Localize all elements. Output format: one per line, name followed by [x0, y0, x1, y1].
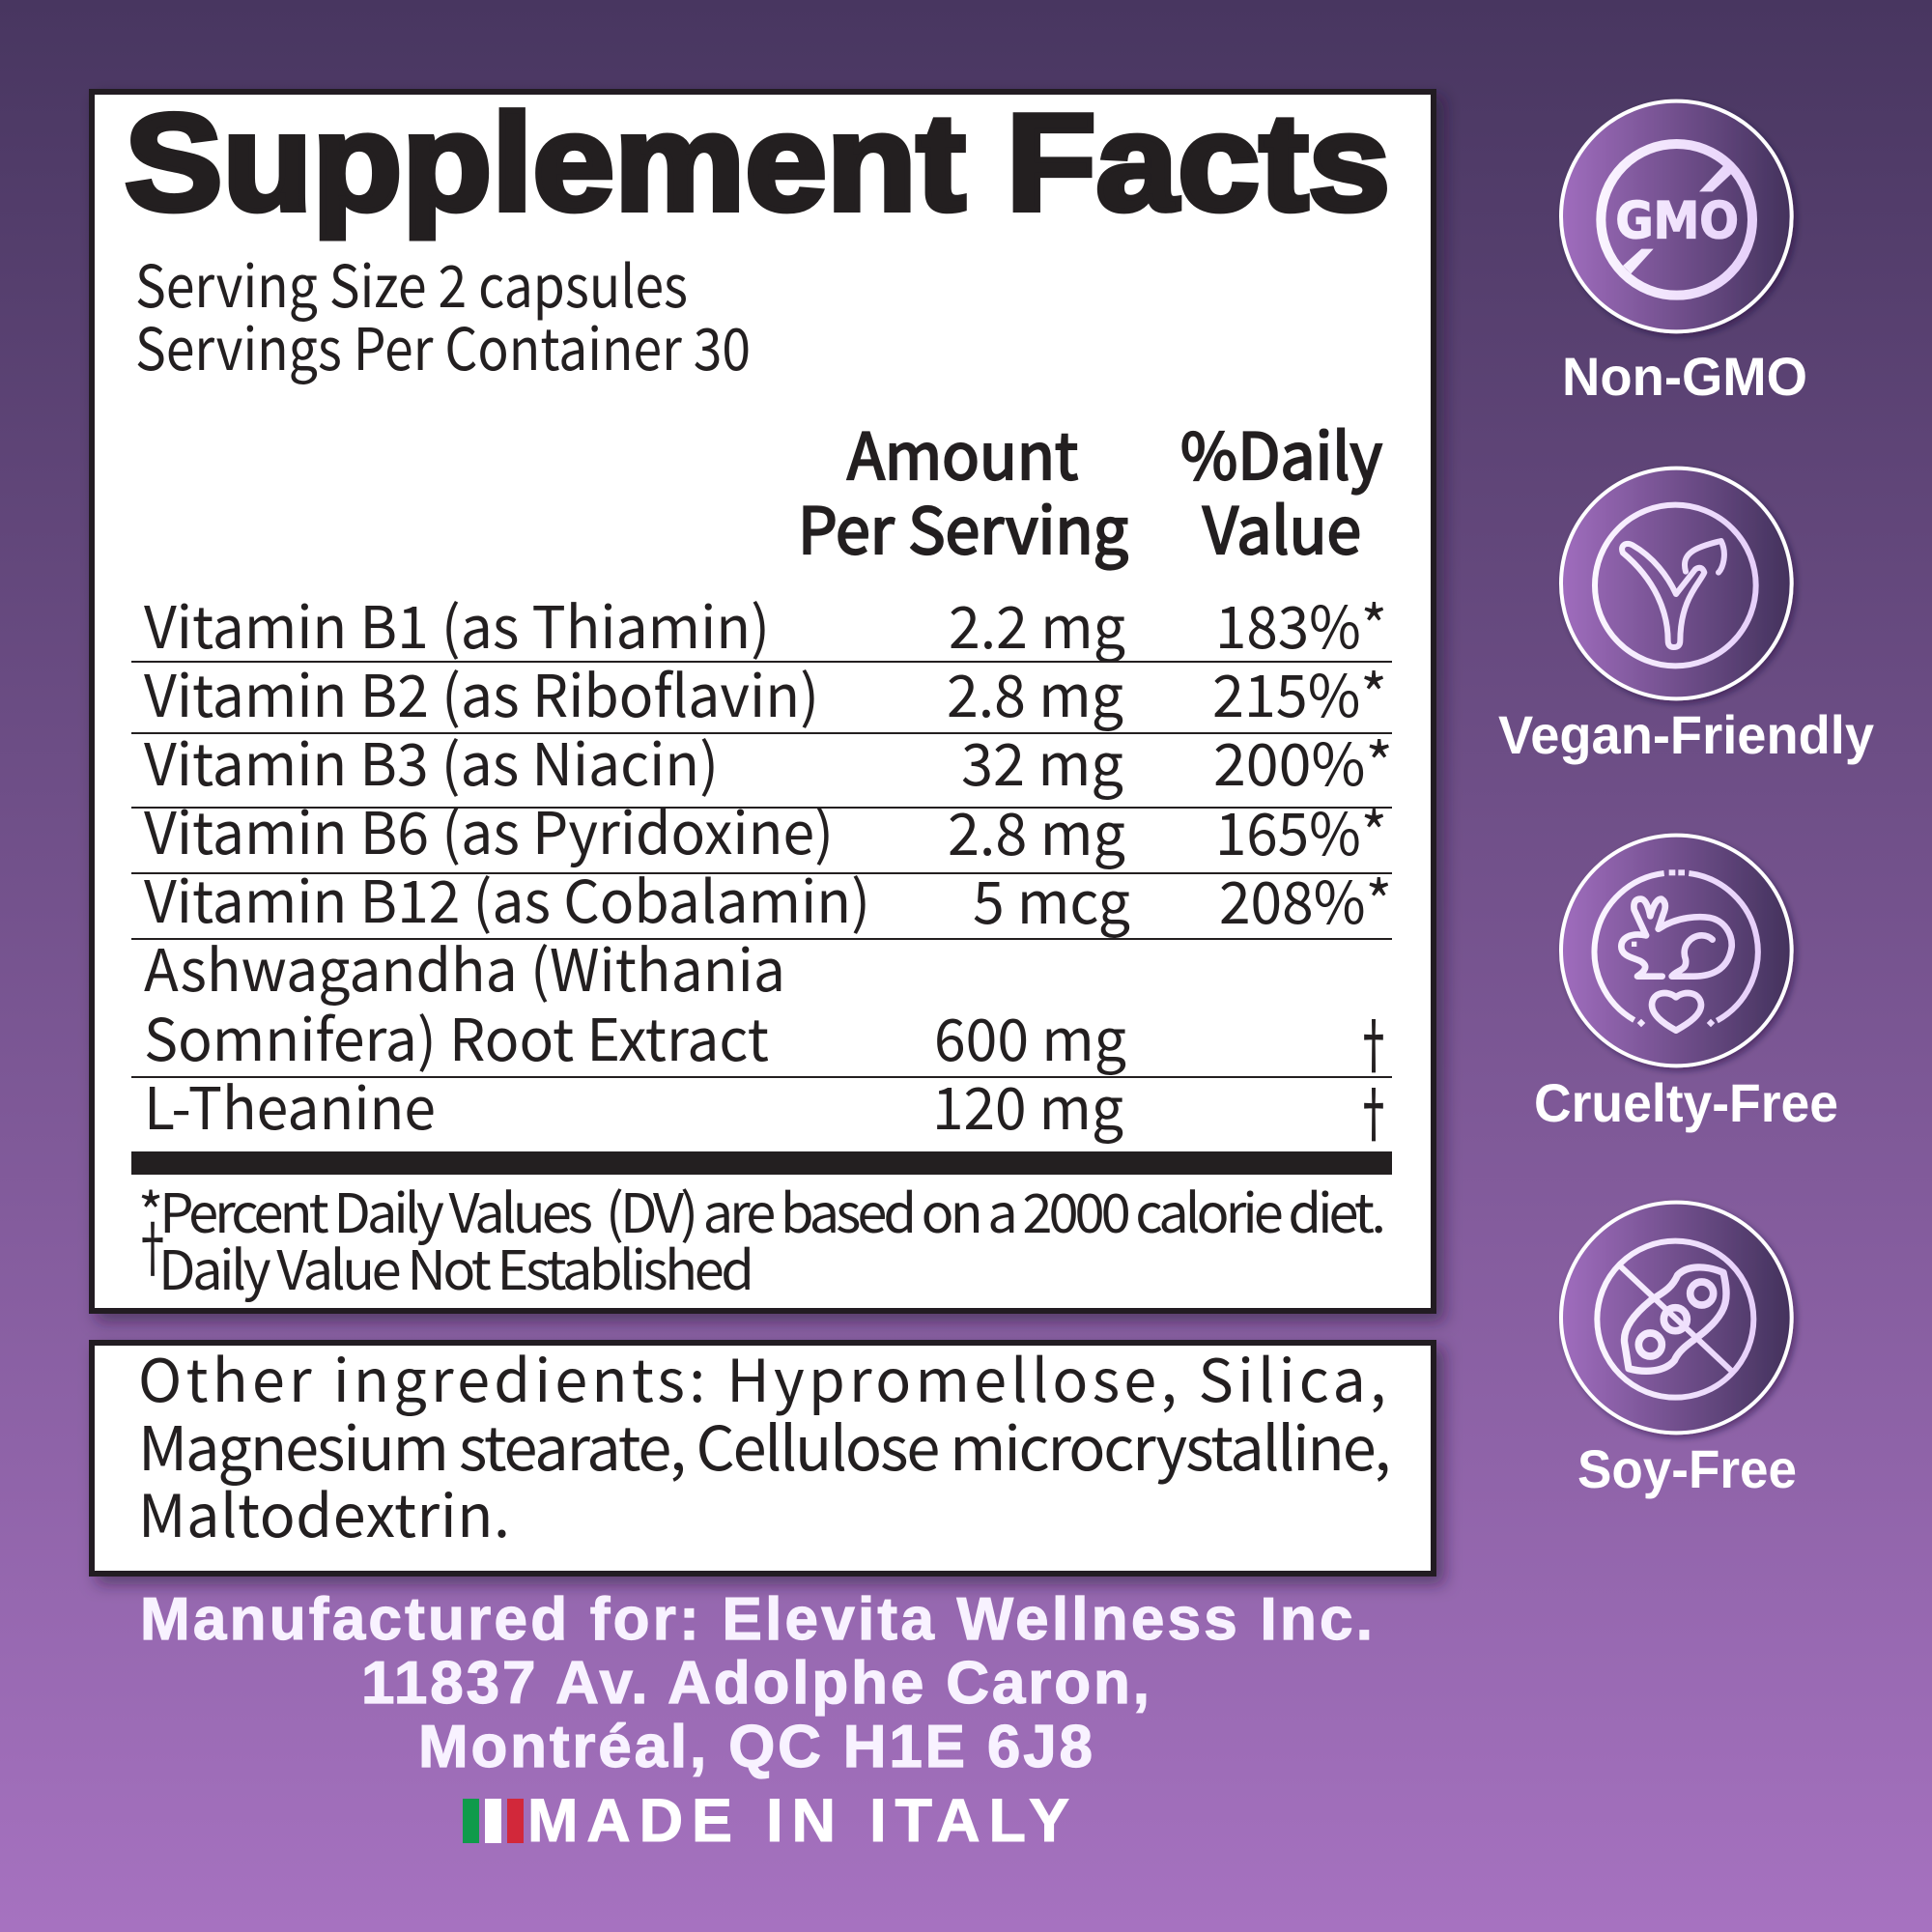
icon: no soy	[1561, 1203, 1792, 1433]
label: non-GMO: Non-GMO	[1562, 346, 1807, 407]
badge: non-GMO	[1561, 101, 1807, 407]
row: vitamin B2: 2.8 mg	[947, 650, 1123, 734]
icon: no GMO: GMO	[1615, 192, 1739, 251]
column header: amount per serving: Amount	[847, 406, 1078, 498]
row: vitamin B2: 215%*	[1212, 650, 1387, 734]
column header: daily value	[1180, 406, 1382, 573]
icon: no GMO	[1561, 101, 1792, 331]
row: vitamin B1	[144, 582, 1387, 666]
panel: other ingredients	[92, 1333, 1434, 1574]
serving info	[135, 241, 751, 387]
column header: amount per serving	[798, 406, 1128, 573]
row: L-theanine: L-Theanine	[144, 1063, 436, 1147]
row: vitamin B3: 200%*	[1213, 719, 1393, 803]
row: vitamin B12: 5 mcg	[973, 857, 1130, 941]
badge: cruelty-free	[1534, 836, 1838, 1133]
row: vitamin B3: Vitamin B3 (as Niacin)	[144, 719, 719, 803]
row: ashwagandha: Ashwagandha (Withania	[144, 924, 785, 1009]
row: L-theanine	[144, 1063, 1393, 1156]
badge: soy-free	[1561, 1203, 1797, 1499]
row: vitamin B3	[144, 719, 1393, 803]
label: cruelty-free: Cruelty-Free	[1534, 1072, 1838, 1133]
row: ashwagandha: †	[1354, 995, 1393, 1088]
footnotes: *Percent Daily Values (DV) are based on a 2000 calorie diet.	[138, 1171, 1386, 1249]
row: vitamin B2	[144, 650, 1387, 734]
manufacturer address: 11837 Av. Adolphe Caron,	[361, 1650, 1150, 1717]
row: vitamin B1: Vitamin B1 (as Thiamin)	[144, 582, 770, 666]
row: ashwagandha	[144, 924, 1393, 1088]
serving info: Serving Size 2 capsules	[135, 241, 688, 325]
row: vitamin B2: Vitamin B2 (as Riboflavin)	[144, 650, 819, 734]
panel: other ingredients: Other ingredients: Hypromellose, Silica,	[138, 1333, 1386, 1419]
title: Supplement Facts	[125, 86, 1390, 240]
column header: daily value: %Daily	[1180, 406, 1382, 498]
icon: italian flag	[463, 1799, 524, 1843]
label: soy-free: Soy-Free	[1577, 1438, 1797, 1499]
row: L-theanine: 120 mg	[932, 1063, 1123, 1147]
row: vitamin B6: Vitamin B6 (as Pyridoxine)	[144, 787, 834, 871]
column header: amount per serving: Per Serving	[798, 480, 1128, 573]
manufacturer address: Montréal, QC H1E 6J8	[418, 1714, 1093, 1780]
row: vitamin B12: 208%*	[1219, 857, 1392, 941]
manufacturer address: Manufactured for: Elevita Wellness Inc.	[140, 1586, 1373, 1653]
footnotes	[131, 1171, 1386, 1306]
row: vitamin B1: 2.2 mg	[949, 582, 1125, 666]
row: L-theanine: †	[1354, 1064, 1393, 1156]
row: vitamin B6: 2.8 mg	[948, 788, 1125, 872]
label: vegan-friendly: Vegan-Friendly	[1498, 704, 1874, 765]
row: vitamin B6	[144, 787, 1387, 872]
footnotes: †	[131, 1196, 174, 1292]
row: vitamin B12: Vitamin B12 (as Cobalamin)	[144, 856, 870, 940]
icon: sprout	[1561, 469, 1792, 698]
badge: vegan-friendly	[1498, 469, 1874, 765]
panel: other ingredients: Maltodextrin.	[138, 1468, 510, 1554]
thick divider	[131, 1151, 1392, 1175]
panel: supplement facts	[92, 86, 1434, 1311]
icon: rabbit and heart	[1561, 836, 1792, 1065]
made in italy: MADE IN ITALY	[527, 1787, 1069, 1855]
row: vitamin B3: 32 mg	[961, 719, 1123, 803]
serving info: Servings Per Container 30	[135, 303, 751, 387]
footnotes: Daily Value Not Established	[158, 1228, 754, 1306]
row: ashwagandha: 600 mg	[934, 994, 1126, 1078]
panel: other ingredients: Magnesium stearate, Cellulose microcrystalline,	[138, 1401, 1391, 1489]
row: vitamin B12	[144, 856, 1392, 941]
column header: daily value: Value	[1203, 480, 1361, 573]
row: vitamin B1: 183%*	[1215, 582, 1387, 666]
manufacturer address	[140, 1586, 1373, 1780]
row: vitamin B6: 165%*	[1215, 788, 1387, 872]
row: ashwagandha: Somnifera) Root Extract	[144, 994, 769, 1078]
